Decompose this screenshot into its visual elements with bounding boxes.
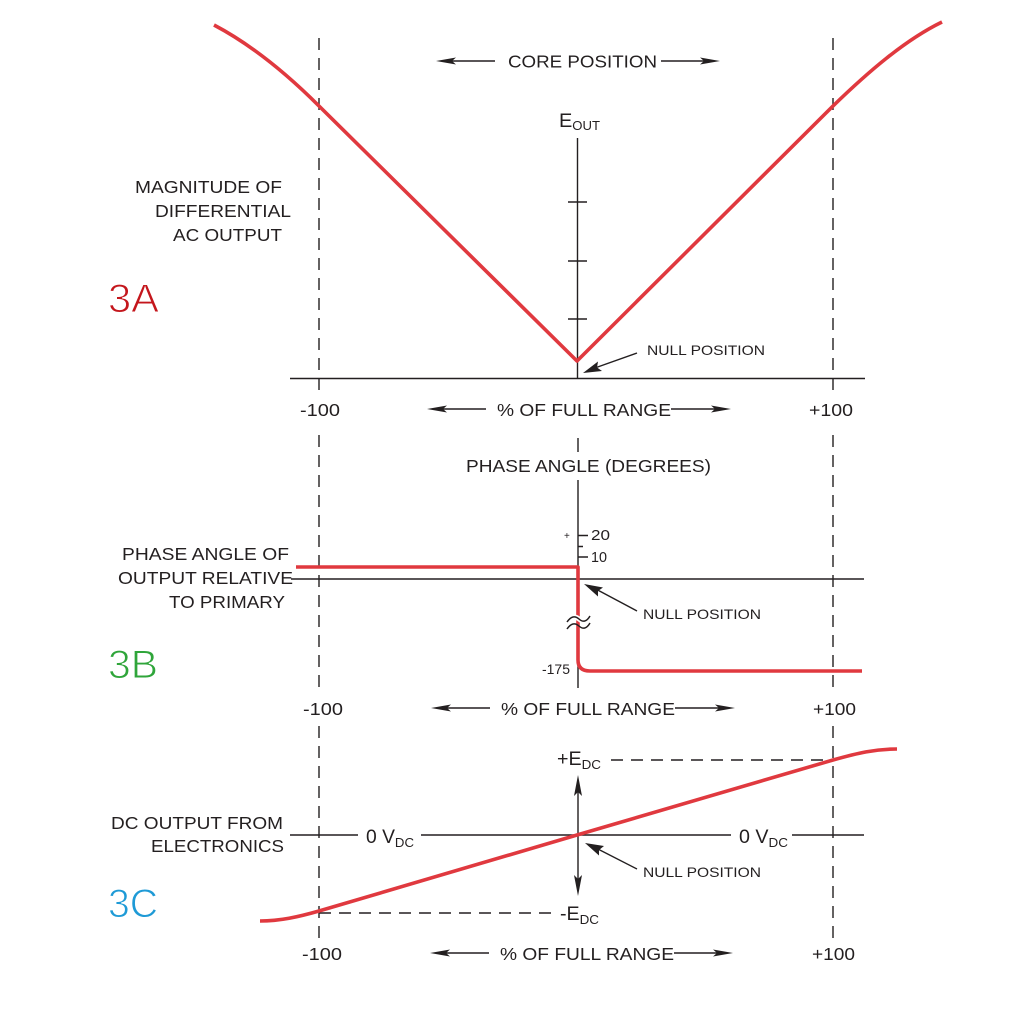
range labels: +100 — [812, 944, 855, 964]
axis tick values: + — [564, 531, 570, 542]
range labels: +100 — [809, 400, 853, 420]
right 0 VDC label: 0 V — [739, 827, 768, 848]
y-axis description: MAGNITUDE OF — [135, 177, 282, 197]
panel: 3B phase angle — [108, 438, 864, 719]
range labels — [300, 400, 853, 420]
axis tick values: 10 — [591, 549, 607, 566]
range labels: % OF FULL RANGE — [500, 944, 674, 964]
range labels — [302, 944, 855, 964]
E out axis label: OUT — [572, 119, 600, 133]
left 0 VDC label: DC — [395, 835, 414, 850]
y-axis description — [111, 813, 284, 856]
range labels: % OF FULL RANGE — [501, 699, 675, 719]
horizontal axis — [290, 378, 865, 380]
break symbol — [567, 616, 590, 629]
null position callout: NULL POSITION — [643, 606, 761, 622]
null position callout — [584, 584, 761, 622]
dashed E DC guides — [319, 760, 833, 913]
vertical phase axis with ticks — [578, 438, 588, 688]
range labels: % OF FULL RANGE — [497, 400, 671, 420]
right dashed reference line — [832, 38, 834, 938]
y-axis description: TO PRIMARY — [169, 592, 285, 612]
right 0 VDC label: DC — [769, 835, 788, 850]
null position callout: NULL POSITION — [643, 864, 761, 880]
plus E DC label: DC — [582, 757, 601, 772]
y-axis description: DIFFERENTIAL — [155, 201, 291, 221]
panel: 3A magnitude of differential AC output — [108, 22, 942, 420]
red DC output curve — [260, 749, 897, 921]
E out axis label: E — [559, 111, 572, 132]
horizontal zero line — [290, 834, 864, 836]
y-axis description — [118, 544, 293, 612]
horizontal zero line — [291, 578, 864, 580]
range labels: -100 — [302, 944, 342, 964]
axis tick values — [542, 527, 610, 677]
core position arrow label — [436, 52, 720, 72]
range labels: -100 — [300, 400, 340, 420]
y-axis description: OUTPUT RELATIVE — [118, 568, 293, 588]
core position arrow label: CORE POSITION — [508, 52, 657, 72]
red phase curve — [296, 567, 862, 671]
phase angle axis title: PHASE ANGLE (DEGREES) — [466, 456, 711, 476]
left dashed reference line — [318, 38, 320, 938]
vertical axis with ticks — [568, 138, 587, 379]
minus E DC label: -E — [560, 904, 579, 925]
null position callout — [585, 843, 761, 880]
axis tick values: -175 — [542, 661, 570, 677]
heading 3C: 3C — [108, 882, 158, 926]
y-axis description: ELECTRONICS — [151, 836, 284, 856]
left 0 VDC label: 0 V — [366, 827, 395, 848]
panel: 3C DC output — [108, 749, 897, 964]
y-axis description: PHASE ANGLE OF — [122, 544, 289, 564]
minus E DC label: DC — [580, 912, 599, 927]
red magnitude curve — [214, 22, 942, 361]
range labels: +100 — [813, 699, 856, 719]
double vertical arrow — [574, 775, 582, 896]
heading 3A: 3A — [108, 277, 159, 321]
y-axis description — [135, 177, 291, 245]
range labels: -100 — [303, 699, 343, 719]
axis tick values: 20 — [591, 527, 610, 544]
y-axis description: AC OUTPUT — [173, 225, 282, 245]
y-axis description: DC OUTPUT FROM — [111, 813, 283, 833]
range labels — [303, 699, 856, 719]
plus E DC label: +E — [557, 749, 581, 770]
heading 3B: 3B — [108, 643, 158, 687]
null position callout — [583, 342, 765, 373]
null position callout: NULL POSITION — [647, 342, 765, 358]
